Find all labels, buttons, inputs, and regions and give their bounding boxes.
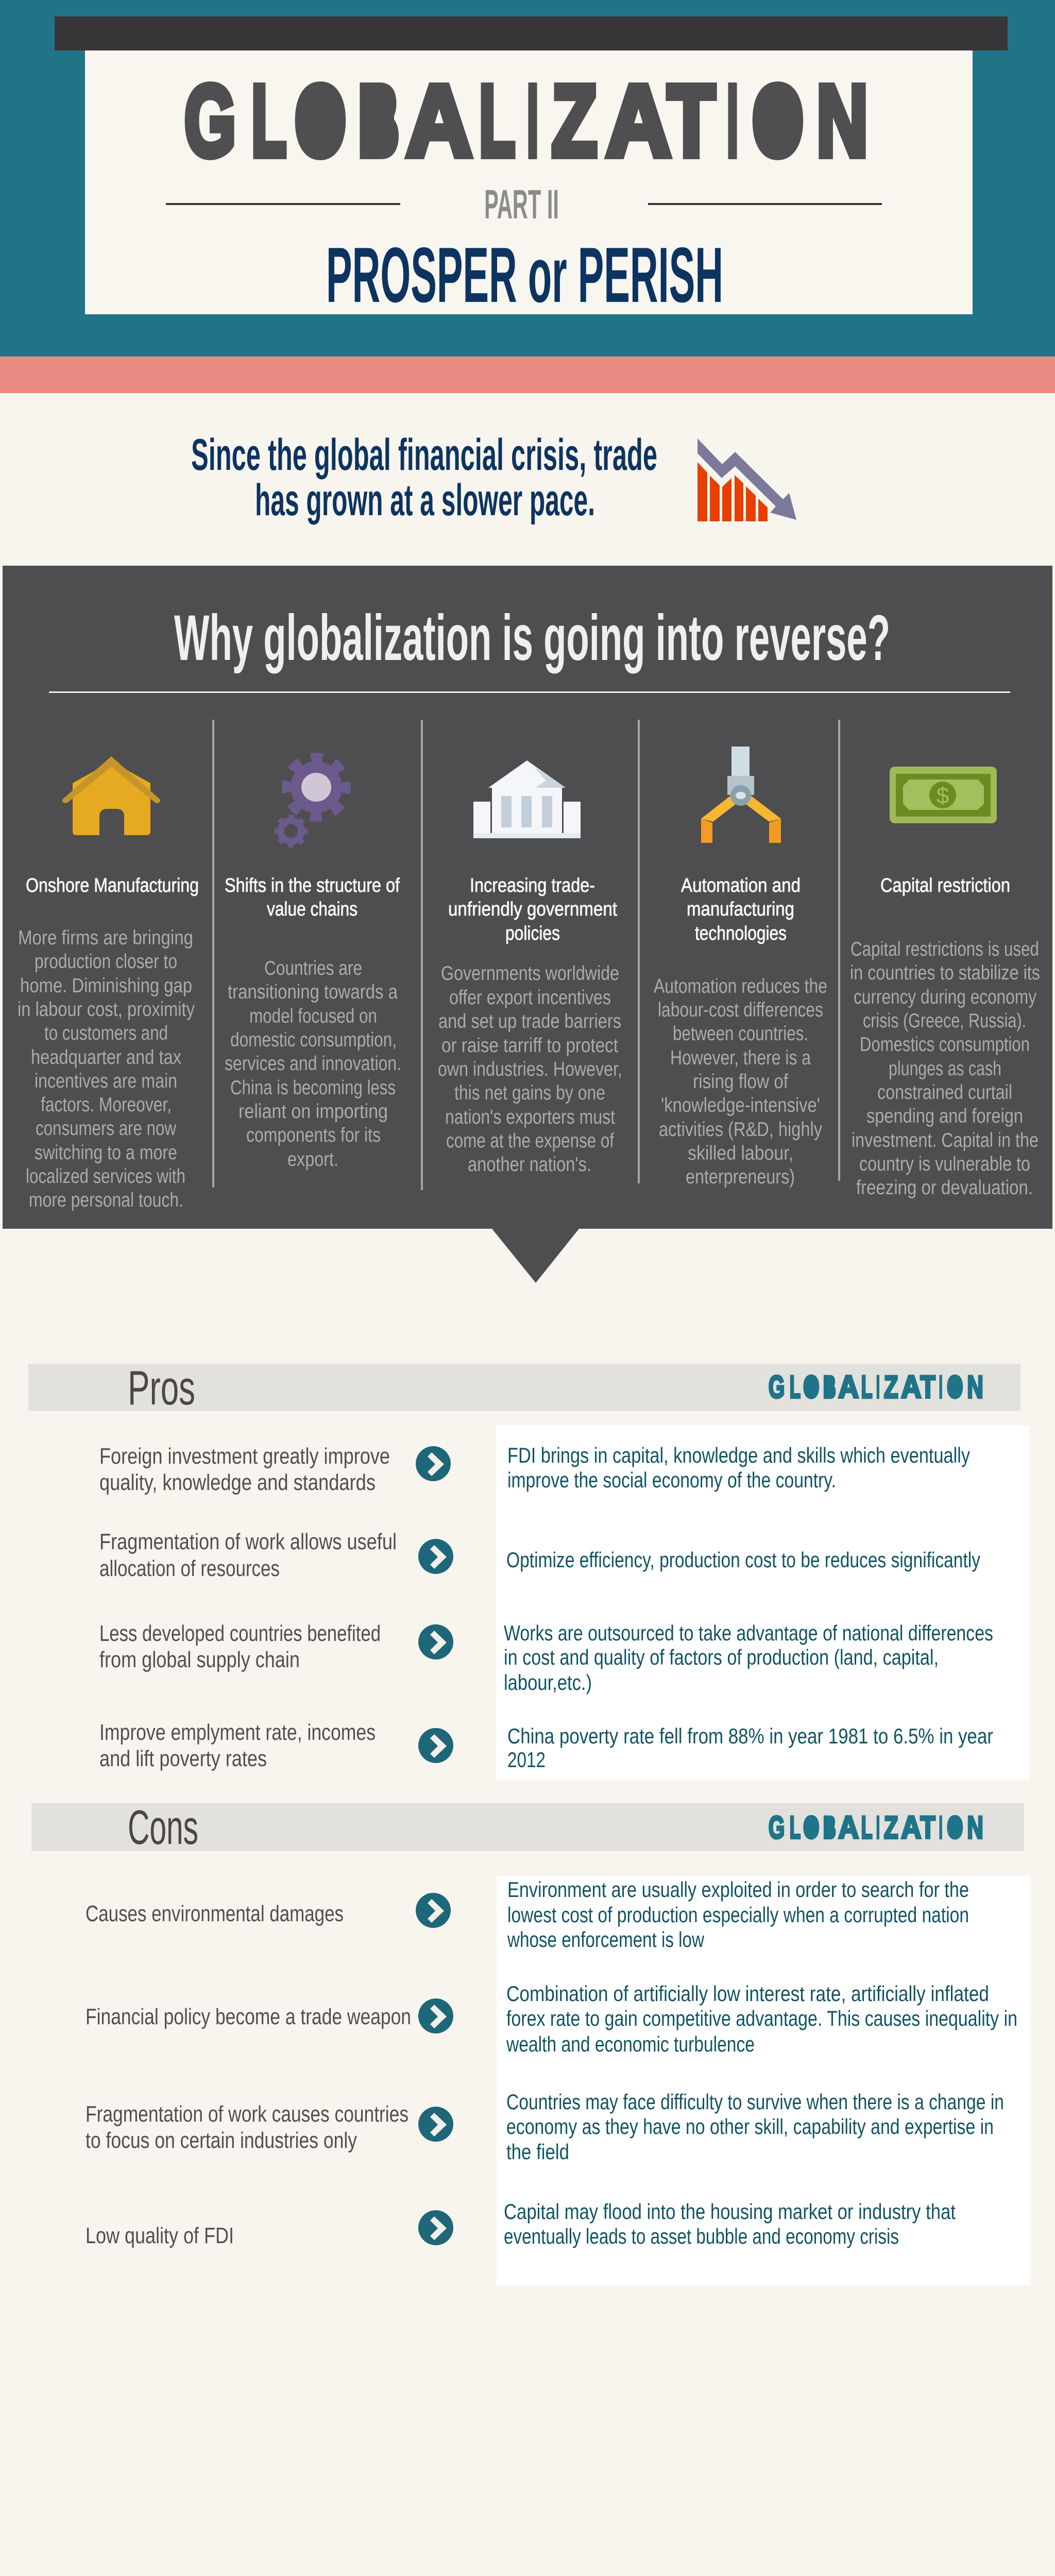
column body: transitioning towards a (228, 981, 398, 1003)
pro row 1: quality, knowledge and standards (99, 1470, 376, 1495)
brand label: A (901, 1369, 921, 1405)
con row 2 (86, 1981, 1017, 2056)
title: B (358, 64, 399, 177)
heading: cons: Cons (128, 1800, 198, 1854)
brand label: L (861, 1810, 873, 1845)
title: Z (552, 64, 597, 177)
title: N (816, 64, 868, 177)
column body: consumers are now (36, 1117, 177, 1140)
text: trade statement: has grown at a slower pace. (255, 476, 595, 525)
text: trade statement (191, 430, 657, 525)
detail text: eventually leads to asset bubble and economy crisis (504, 2224, 899, 2248)
column heading: Shifts in the structure of (225, 875, 400, 896)
pro row 2 (99, 1529, 980, 1581)
brand label: Z (884, 1810, 898, 1845)
brand label: O (947, 1810, 963, 1845)
detail text: the field (506, 2140, 569, 2164)
column body: between countries. (673, 1023, 808, 1045)
icon: chevron (418, 2210, 453, 2245)
column heading: unfriendly government (448, 899, 617, 920)
detail text: wealth and economic turbulence (506, 2032, 755, 2056)
column body: export. (287, 1148, 338, 1171)
pro row 3: Less developed countries benefited (99, 1621, 381, 1646)
brand label: L (861, 1369, 873, 1405)
column heading (448, 875, 617, 944)
detail text (507, 1443, 970, 1492)
column body (654, 975, 827, 1188)
column body: own industries. However, (438, 1058, 622, 1080)
brand label (769, 1810, 983, 1845)
pro row 4 (99, 1720, 993, 1772)
column body: or raise tarriff to protect (441, 1035, 618, 1057)
divider right (648, 203, 882, 205)
title: A (406, 64, 472, 177)
pro row 4: Improve emplyment rate, incomes (99, 1720, 376, 1745)
detail text: in cost and quality of factors of production (land, capital, (504, 1645, 939, 1669)
panel: cons (31, 1800, 1030, 2285)
column heading: Automation and (681, 875, 801, 896)
divider left (166, 203, 400, 205)
pro row 4: and lift poverty rates (99, 1746, 267, 1771)
con row 4: Low quality of FDI (86, 2223, 234, 2248)
icon: government building (473, 760, 581, 838)
brand label: T (921, 1369, 935, 1405)
detail text: Capital may flood into the housing market or industry that (504, 2199, 956, 2224)
icon: gears (277, 757, 346, 845)
detail text: labour,etc.) (504, 1670, 592, 1694)
brand label: L (790, 1810, 801, 1845)
column body: 'knowledge-intensive' (661, 1094, 820, 1116)
column body (225, 957, 401, 1171)
brand label: T (921, 1810, 935, 1845)
title: G (184, 64, 236, 177)
column heading: manufacturing (687, 899, 794, 920)
column body (850, 938, 1040, 1199)
column body: China is becoming less (230, 1077, 396, 1099)
pro row 3 (99, 1621, 993, 1694)
brand label: N (967, 1810, 983, 1845)
title (184, 64, 868, 177)
column body: rising flow of (693, 1071, 788, 1093)
column: value chains (225, 875, 401, 1171)
column body: plunges as cash (889, 1058, 1001, 1080)
column body: and set up trade barriers (438, 1010, 621, 1032)
column heading: policies (505, 923, 560, 944)
pro row 2: allocation of resources (99, 1556, 280, 1581)
con row 3: Fragmentation of work causes countries (86, 2102, 409, 2127)
panel: why globalization is going into reverse (3, 566, 1052, 1283)
column body: Governments worldwide (441, 962, 619, 985)
icon: banknote (890, 767, 997, 823)
column body: constrained curtail (877, 1081, 1012, 1104)
con row 3 (86, 2090, 1004, 2164)
column body: spending and foreign (866, 1105, 1023, 1127)
column heading: technologies (695, 923, 787, 944)
column body: services and innovation. (225, 1053, 401, 1075)
column body: enterpreneurs) (686, 1166, 795, 1188)
column body (18, 927, 195, 1211)
column heading: value chains (267, 899, 358, 920)
detail text (504, 2199, 956, 2248)
brand label: B (823, 1369, 836, 1405)
white detail panel (497, 1876, 1030, 2285)
detail text: whose enforcement is low (507, 1927, 705, 1952)
column body: nation's exporters must (445, 1106, 615, 1128)
column body: incentives are main (35, 1070, 177, 1092)
column body: However, there is a (670, 1047, 811, 1069)
column body: another nation's. (468, 1154, 591, 1176)
column body (438, 962, 622, 1176)
column body: reliant on importing (239, 1100, 388, 1123)
column heading (225, 875, 400, 920)
title: A (606, 64, 671, 177)
column body: more personal touch. (29, 1189, 183, 1211)
column: onshore manufacturing (18, 875, 199, 1211)
column body: switching to a more (35, 1142, 177, 1164)
column body: headquarter and tax (31, 1046, 181, 1069)
icon: chevron (418, 1728, 453, 1763)
column body: to customers and (44, 1022, 168, 1044)
icon: chevron (416, 1893, 451, 1928)
brand label: Z (884, 1369, 898, 1405)
column body: activities (R&D, highly (659, 1118, 822, 1141)
text: trade statement: Since the global financial crisis, trade (191, 430, 657, 480)
title: I (527, 64, 538, 177)
icon: chevron (418, 1624, 453, 1659)
column body: production closer to (35, 951, 177, 973)
icon: falling trade chart (697, 438, 796, 521)
icon: house (62, 756, 160, 835)
con row 2: Financial policy become a trade weapon (86, 2004, 411, 2029)
detail text (507, 1877, 969, 1952)
detail text: improve the social economy of the country. (507, 1468, 836, 1492)
column: automation (654, 875, 827, 1188)
title: I (727, 64, 738, 177)
subtitle: part ii: PART II (484, 181, 559, 227)
title: L (479, 64, 515, 177)
panel: pros (28, 1361, 1029, 1780)
column body: localized services with (26, 1165, 185, 1188)
brand label: O (803, 1369, 820, 1405)
brand label: O (803, 1810, 820, 1845)
brand label: I (876, 1810, 880, 1845)
detail text (504, 1621, 993, 1694)
icon: banknote: $ (937, 783, 949, 808)
con row 1: Causes environmental damages (86, 1901, 344, 1926)
brand label: I (939, 1369, 943, 1405)
brand label: B (823, 1810, 836, 1845)
icon: chevron (416, 1446, 451, 1481)
brand label: I (939, 1810, 943, 1845)
column body: come at the expense of (446, 1130, 614, 1152)
title: O (752, 64, 804, 177)
column body: labour-cost differences (658, 999, 823, 1021)
pro row 1: Foreign investment greatly improve (99, 1444, 390, 1469)
column heading (681, 875, 801, 944)
brand label: A (901, 1810, 921, 1845)
brand label: O (947, 1369, 963, 1405)
title: O (295, 64, 346, 177)
column heading: Increasing trade- (470, 875, 595, 896)
column body: More firms are bringing (18, 927, 193, 949)
column body: home. Diminishing gap (20, 975, 192, 997)
column body: skilled labour, (688, 1142, 793, 1164)
heading: pros: Pros (128, 1361, 195, 1415)
pro row 2: Fragmentation of work allows useful (99, 1529, 397, 1554)
column body: domestic consumption, (230, 1029, 397, 1051)
detail text: 2012 (507, 1748, 546, 1772)
column body: components for its (246, 1124, 381, 1146)
icon: chevron (418, 2107, 453, 2142)
title: L (251, 64, 286, 177)
panel: header banner (0, 0, 1055, 393)
column body: Countries are (264, 957, 362, 979)
brand label (769, 1369, 983, 1405)
column: trade policies (438, 875, 622, 1176)
column body: offer export incentives (449, 987, 611, 1009)
pro row 1 (99, 1443, 970, 1495)
brand label: G (769, 1810, 785, 1845)
detail text (506, 1981, 1017, 2056)
con row 4 (86, 2199, 956, 2248)
brand label: A (838, 1810, 859, 1845)
title: T (668, 64, 715, 177)
column body: this net gains by one (454, 1082, 605, 1104)
column body: in labour cost, proximity (18, 998, 195, 1021)
detail text (506, 2090, 1004, 2164)
column body: model focused on (249, 1005, 377, 1027)
column body: factors. Moreover, (41, 1094, 172, 1116)
column: capital restriction (850, 875, 1040, 1199)
brand label: L (790, 1369, 801, 1405)
brand label: I (876, 1369, 880, 1405)
icon: chevron (418, 1998, 453, 2033)
icon: robotic claw (701, 747, 781, 843)
brand label: N (967, 1369, 983, 1405)
white detail panel (496, 1426, 1029, 1780)
con row 1 (86, 1877, 969, 1952)
pro row 3: from global supply chain (99, 1647, 300, 1672)
icon: chevron (418, 1539, 453, 1574)
brand label: G (769, 1369, 785, 1405)
brand label: A (838, 1369, 859, 1405)
column body: Automation reduces the (654, 975, 827, 997)
column heading: Capital restriction (880, 875, 1010, 896)
con row 3: to focus on certain industries only (86, 2128, 357, 2153)
detail text (507, 1724, 993, 1772)
column heading: Onshore Manufacturing (26, 875, 199, 896)
